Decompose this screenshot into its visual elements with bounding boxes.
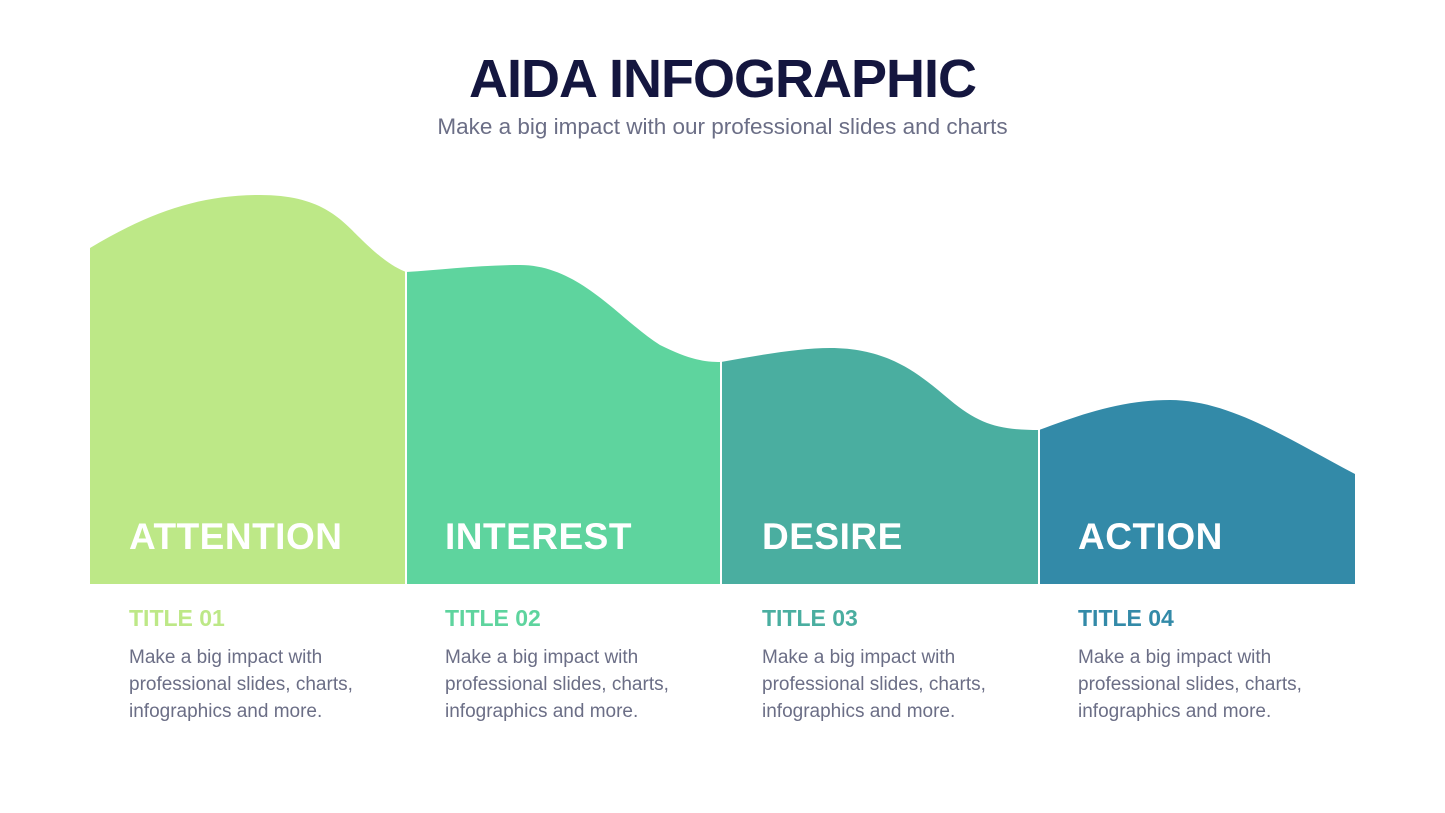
text 04 xyxy=(1078,647,1302,722)
title 04: TITLE 04 xyxy=(1078,605,1174,631)
text 03: infographics and more. xyxy=(762,701,955,722)
label: action: ACTION xyxy=(1078,516,1223,557)
text 03: Make a big impact with xyxy=(762,647,955,668)
label: interest: INTEREST xyxy=(445,516,632,557)
text 01: professional slides, charts, xyxy=(129,674,353,695)
segment: attention xyxy=(90,195,406,584)
segment: action xyxy=(1039,400,1355,584)
text 03: professional slides, charts, xyxy=(762,674,986,695)
title 02: TITLE 02 xyxy=(445,605,541,631)
text 01 xyxy=(129,647,353,722)
text 02 xyxy=(445,647,669,722)
text 04: professional slides, charts, xyxy=(1078,674,1302,695)
label: desire: DESIRE xyxy=(762,516,903,557)
label: attention: ATTENTION xyxy=(129,516,342,557)
segment: desire xyxy=(721,348,1039,584)
text 03 xyxy=(762,647,986,722)
text 02: infographics and more. xyxy=(445,701,638,722)
text 04: Make a big impact with xyxy=(1078,647,1271,668)
text 04: infographics and more. xyxy=(1078,701,1271,722)
title 01: TITLE 01 xyxy=(129,605,225,631)
text 02: Make a big impact with xyxy=(445,647,638,668)
title 03: TITLE 03 xyxy=(762,605,858,631)
text 01: Make a big impact with xyxy=(129,647,322,668)
text 01: infographics and more. xyxy=(129,701,322,722)
title: AIDA INFOGRAPHIC xyxy=(469,49,976,109)
subtitle: Make a big impact with our professional slides and charts xyxy=(437,114,1008,139)
segment: interest xyxy=(406,265,721,584)
text 02: professional slides, charts, xyxy=(445,674,669,695)
